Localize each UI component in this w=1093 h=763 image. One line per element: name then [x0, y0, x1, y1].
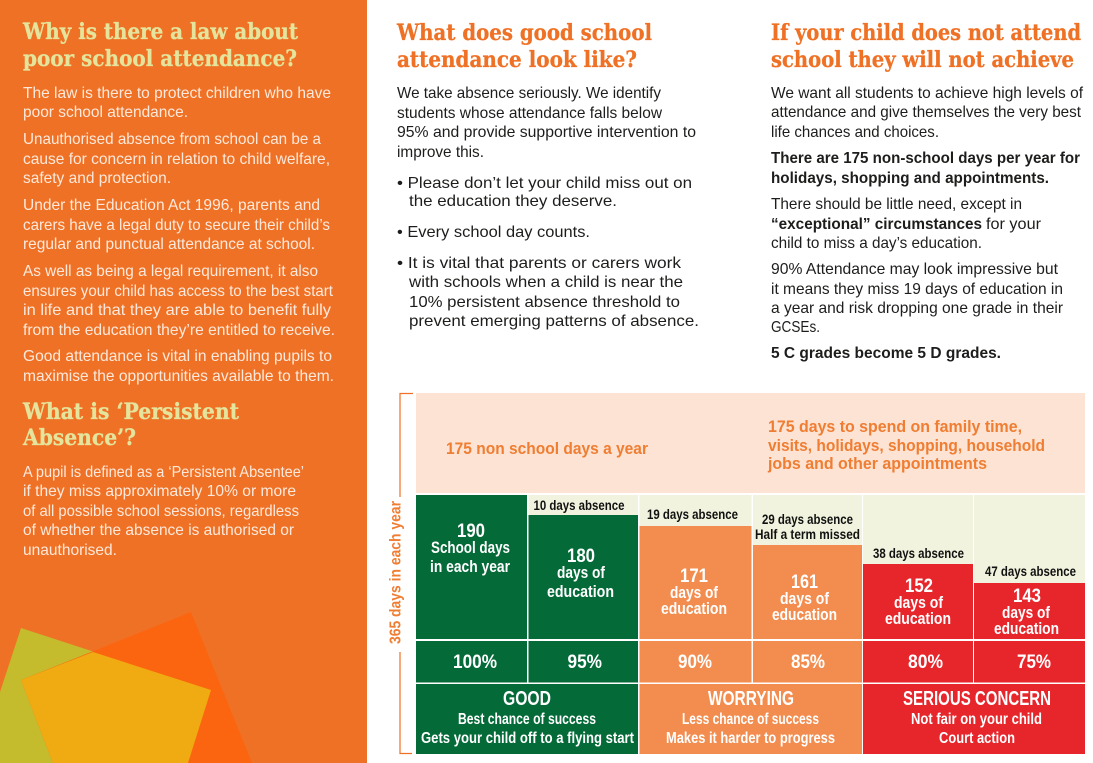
text block: persistent absentee definition: of all possible school sessions, regardless: [23, 503, 299, 520]
text block: achievement and exceptional circumstances: 5 C grades become 5 D grades.: [771, 345, 1001, 362]
column: 85 percent: [753, 495, 862, 682]
text block: achievement and exceptional circumstances: holidays, shopping and appointments.: [771, 170, 1049, 187]
column: 75 percent: 75%: [1017, 652, 1051, 673]
text block: achievement and exceptional circumstances: There should be little need, except in: [771, 196, 1022, 213]
category: worrying: [640, 684, 862, 754]
panel: 175 non school days: visits, holidays, shopping, household: [768, 437, 1045, 455]
text block: achievement and exceptional circumstances: GCSEs.: [771, 319, 820, 336]
text block: we take absence seriously: improve this.: [397, 144, 484, 161]
text block: achievement and exceptional circumstances: “exceptional” circumstances: [771, 216, 982, 233]
text block: achievement and exceptional circumstances: life chances and choices.: [771, 124, 939, 141]
column: 85 percent: 85%: [791, 652, 825, 673]
icon: overlapping decorative shapes: [0, 612, 252, 763]
column: 90 percent: 90%: [678, 652, 712, 673]
category: good: Gets your child off to a flying start: [421, 730, 634, 747]
text block: achievement and exceptional circumstances: There are 175 non-school days per year for: [771, 150, 1080, 167]
column: 90 percent: 19 days absence: [647, 507, 738, 522]
text block: achievement and exceptional circumstances: for your: [986, 216, 1042, 233]
text block: law explanation: Unauthorised absence from school can be a: [23, 131, 321, 148]
text block: law explanation: The law is there to protect children who have: [23, 85, 331, 102]
category: serious concern: Not fair on your child: [911, 711, 1042, 728]
column: 80 percent: [863, 495, 973, 682]
panel: 175 non school days: 175 days to spend on family time,: [768, 418, 1022, 436]
column: 80 percent: 38 days absence: [873, 546, 964, 561]
column: 95 percent: [528, 495, 638, 682]
column: 100 percent: 100%: [453, 652, 497, 673]
panel: 175 non school days: 175 non school days a year: [446, 440, 649, 458]
text block: law explanation: in life and that they are able to benefit fully: [23, 302, 331, 319]
column: 85 percent: 29 days absence: [762, 512, 853, 527]
column: 90 percent: days of: [670, 584, 718, 602]
column: 85 percent: education: [772, 606, 837, 624]
column: 95 percent: days of: [557, 564, 605, 582]
heading: persistent absence: What is ‘Persistent: [22, 399, 240, 425]
text block: law explanation: poor school attendance.: [23, 104, 188, 121]
heading: what does good attendance look like: What does good school: [396, 20, 652, 46]
text block: law explanation: maximise the opportunities available to them.: [23, 368, 334, 385]
category: worrying: Makes it harder to progress: [666, 730, 835, 747]
text block: persistent absentee definition: A pupil is defined as a ‘Persistent Absentee’: [23, 464, 304, 481]
text block: law explanation: from the education they’re entitled to receive.: [23, 322, 335, 339]
text block: law explanation: carers have a legal duty to secure their child’s: [23, 217, 330, 234]
bullet list: • Please don’t let your child miss out on: [397, 175, 692, 192]
axis bracket: 365 days in each year: 365 days in each year: [388, 501, 404, 644]
column: 100 percent: in each year: [430, 558, 510, 576]
text block: persistent absentee definition: if they miss approximately 10% or more: [23, 483, 296, 500]
text block: achievement and exceptional circumstances: We want all students to achieve high levels of: [771, 85, 1084, 102]
category: good: GOOD: [503, 688, 551, 710]
bullet list: 10% persistent absence threshold to: [409, 294, 680, 311]
bullet list: [397, 175, 699, 330]
column: 90 percent: 171: [680, 565, 708, 587]
column: 95 percent: 180: [567, 545, 595, 567]
heading: persistent absence: Absence’?: [22, 425, 136, 451]
column: 100 percent: School days: [431, 539, 510, 557]
column: 85 percent: days of: [780, 590, 829, 608]
text block: persistent absentee definition: [23, 464, 304, 559]
bullet list: the education they deserve.: [409, 193, 617, 210]
column: 80 percent: days of: [894, 594, 943, 612]
text block: law explanation: Good attendance is vital in enabling pupils to: [23, 348, 332, 365]
panel: left orange sidebar: [0, 0, 367, 763]
bullet list: • Every school day counts.: [397, 224, 590, 241]
column: 75 percent: 143: [1013, 585, 1041, 607]
heading: what does good attendance look like: [396, 20, 652, 73]
text block: law explanation: As well as being a legal requirement, it also: [23, 263, 318, 280]
column: 95 percent: education: [547, 583, 614, 601]
category: good: Best chance of success: [458, 711, 596, 728]
column: 90 percent: [640, 495, 752, 682]
chart: 365 days attendance breakdown: [388, 393, 1085, 754]
column: 95 percent: 10 days absence: [534, 498, 625, 513]
heading: what does good attendance look like: attendance look like?: [397, 47, 637, 73]
category: worrying: WORRYING: [708, 688, 794, 710]
bullet list: with schools when a child is near the: [408, 274, 683, 291]
axis bracket: 365 days in each year: [388, 394, 413, 754]
column: 100 percent: [416, 495, 527, 682]
bullet list: prevent emerging patterns of absence.: [409, 313, 699, 330]
column: 80 percent: 80%: [908, 652, 943, 673]
column: 80 percent: education: [885, 610, 951, 628]
text block: persistent absentee definition: of whether the absence is authorised or: [23, 522, 295, 539]
heading: why is there a law: Why is there a law about: [22, 19, 299, 45]
column: 75 percent: [974, 495, 1085, 682]
text block: law explanation: regular and punctual attendance at school.: [23, 236, 315, 253]
text block: law explanation: safety and protection.: [23, 170, 171, 187]
category: serious concern: [863, 684, 1085, 754]
column: 80 percent: 152: [905, 575, 933, 597]
column: 95 percent: 95%: [568, 652, 602, 673]
text block: achievement and exceptional circumstances: child to miss a day’s education.: [771, 235, 982, 252]
panel: 175 non school days: jobs and other appointments: [767, 455, 987, 473]
text block: we take absence seriously: [397, 85, 696, 161]
category: worrying: Less chance of success: [682, 711, 819, 728]
heading: if your child does not attend: [771, 20, 1081, 73]
text block: achievement and exceptional circumstances: attendance and give themselves the very best: [771, 104, 1082, 121]
text block: persistent absentee definition: unauthorised.: [23, 542, 117, 559]
text block: law explanation: Under the Education Act 1996, parents and: [23, 197, 320, 214]
heading: why is there a law: poor school attendance?: [23, 46, 297, 72]
text block: achievement and exceptional circumstances: [771, 85, 1084, 362]
column: 85 percent: Half a term missed: [755, 527, 860, 542]
text block: law explanation: cause for concern in relation to child welfare,: [23, 151, 330, 168]
category: serious concern: Court action: [939, 730, 1015, 747]
column: 75 percent: 47 days absence: [985, 564, 1076, 579]
text block: law explanation: [23, 85, 335, 385]
text block: achievement and exceptional circumstances: 90% Attendance may look impressive but: [771, 261, 1059, 278]
heading: persistent absence: [22, 399, 240, 451]
bullet list: • It is vital that parents or carers work: [397, 255, 682, 272]
text block: achievement and exceptional circumstances: a year and risk dropping one grade in their: [771, 300, 1064, 317]
category: good: [416, 684, 638, 754]
text block: law explanation: ensures your child has access to the best start: [23, 283, 334, 300]
column: 75 percent: education: [994, 620, 1059, 638]
column: 100 percent: 190: [457, 520, 485, 542]
text block: achievement and exceptional circumstances: it means they miss 19 days of education in: [771, 281, 1063, 298]
text block: we take absence seriously: 95% and provide supportive intervention to: [397, 124, 696, 141]
text block: we take absence seriously: We take absence seriously. We identify: [397, 85, 661, 102]
column: 85 percent: 161: [791, 571, 818, 593]
panel: 175 non school days: [416, 393, 1085, 493]
column: 90 percent: education: [661, 600, 727, 618]
column: 75 percent: days of: [1002, 604, 1050, 622]
text block: we take absence seriously: students whose attendance falls below: [397, 105, 662, 122]
heading: why is there a law: [22, 19, 299, 72]
